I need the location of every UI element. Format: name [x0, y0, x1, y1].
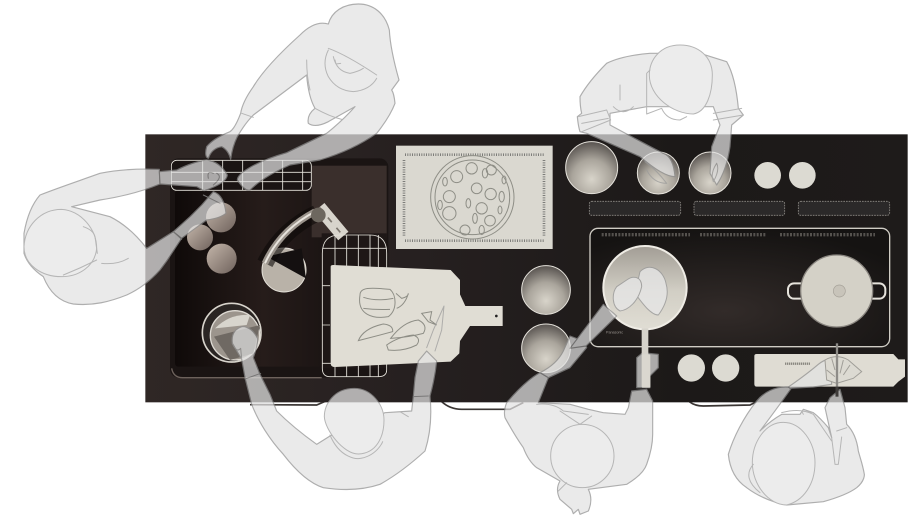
top drying rack	[171, 160, 311, 190]
pot with lid	[788, 255, 885, 327]
induction cooktop	[590, 228, 890, 347]
counter top	[145, 134, 908, 402]
middle bowls	[522, 266, 570, 373]
mat ruler ticks	[404, 155, 545, 241]
bowls top row	[566, 142, 816, 194]
stool lines under counter	[250, 400, 757, 409]
person: man at bottom left	[232, 306, 444, 489]
sink	[170, 158, 388, 378]
pizza mat	[396, 146, 553, 249]
cups in sink	[187, 202, 237, 274]
person: man at top right	[577, 45, 743, 185]
steel pot in sink	[202, 303, 261, 362]
person: woman at bottom right	[728, 360, 864, 505]
faucet	[265, 207, 343, 263]
pan food and hand overlay	[613, 267, 667, 315]
vent strips	[589, 201, 890, 215]
person: top woman	[206, 4, 399, 190]
sink main basin	[175, 190, 322, 367]
spatula arm	[570, 304, 617, 348]
frying pan	[603, 246, 687, 329]
lower wire rack	[322, 235, 387, 377]
sink side basin	[312, 166, 387, 237]
herb board	[754, 354, 905, 387]
drain	[262, 248, 306, 292]
knife	[427, 306, 444, 351]
pizza	[431, 156, 514, 239]
peppers sketch	[358, 288, 437, 350]
person: woman at bottom centre	[504, 304, 658, 514]
cutting board	[331, 265, 503, 367]
induction cooktop: Panasonic	[606, 330, 623, 334]
person: left woman	[24, 160, 227, 304]
hand gripping pan handle	[637, 353, 658, 388]
small dishes	[678, 354, 739, 382]
herbs and knife on board	[825, 343, 862, 397]
board handle hole	[495, 315, 498, 317]
pan handle	[642, 328, 650, 388]
